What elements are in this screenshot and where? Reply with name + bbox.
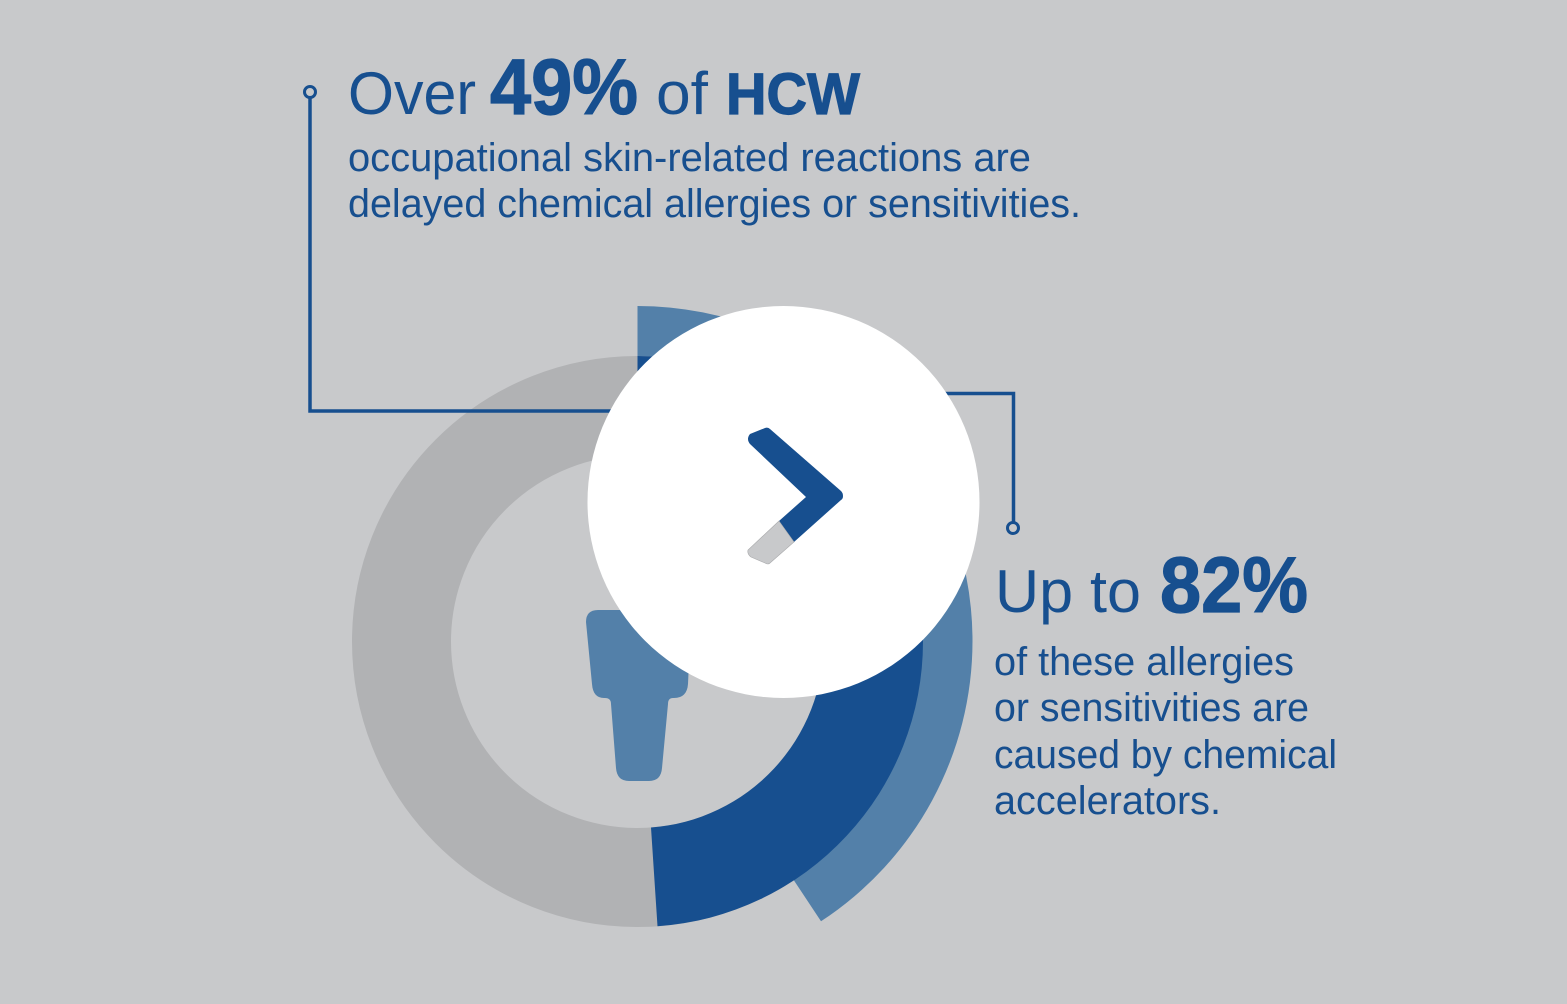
connector: bottom callout line — [940, 394, 1018, 534]
text: bottom description: accelerators. — [994, 779, 1221, 823]
text: bottom description: of these allergies — [994, 640, 1294, 684]
heading: Up to 82%: Up to — [995, 558, 1141, 625]
text: top description: occupational skin-related reactions are — [348, 136, 1031, 180]
light blue outer arc — [638, 306, 972, 921]
white center circle — [588, 306, 980, 698]
gray donut ring — [402, 406, 874, 878]
text: top description — [348, 136, 1081, 226]
icon: glove dispenser base — [586, 610, 690, 781]
connector: top callout line — [304, 86, 620, 411]
text: bottom description: or sensitivities are — [994, 686, 1309, 730]
chevron gray segment — [748, 521, 794, 564]
heading: Up to 82%: 82% — [1160, 540, 1308, 629]
heading: Over 49% of HCW — [348, 42, 860, 131]
chart: donut with 49% and 82% arcs — [402, 306, 972, 926]
heading: Over 49% of HCW: of — [656, 60, 708, 127]
heading: Over 49% of HCW: 49% — [490, 42, 638, 131]
heading: Up to 82% — [995, 540, 1308, 629]
heading: Over 49% of HCW: Over — [348, 60, 476, 127]
text: top description: delayed chemical allergies or sensitivities. — [348, 182, 1081, 226]
text: bottom description: caused by chemical — [994, 733, 1337, 777]
dark blue 49% arc — [638, 356, 923, 926]
icon: chevron — [748, 428, 843, 564]
heading: Over 49% of HCW: HCW — [726, 62, 860, 127]
callout: top statistic — [348, 42, 1081, 226]
chevron dark segment — [748, 428, 843, 542]
callout: bottom statistic — [994, 540, 1337, 823]
text: bottom description — [994, 640, 1337, 823]
